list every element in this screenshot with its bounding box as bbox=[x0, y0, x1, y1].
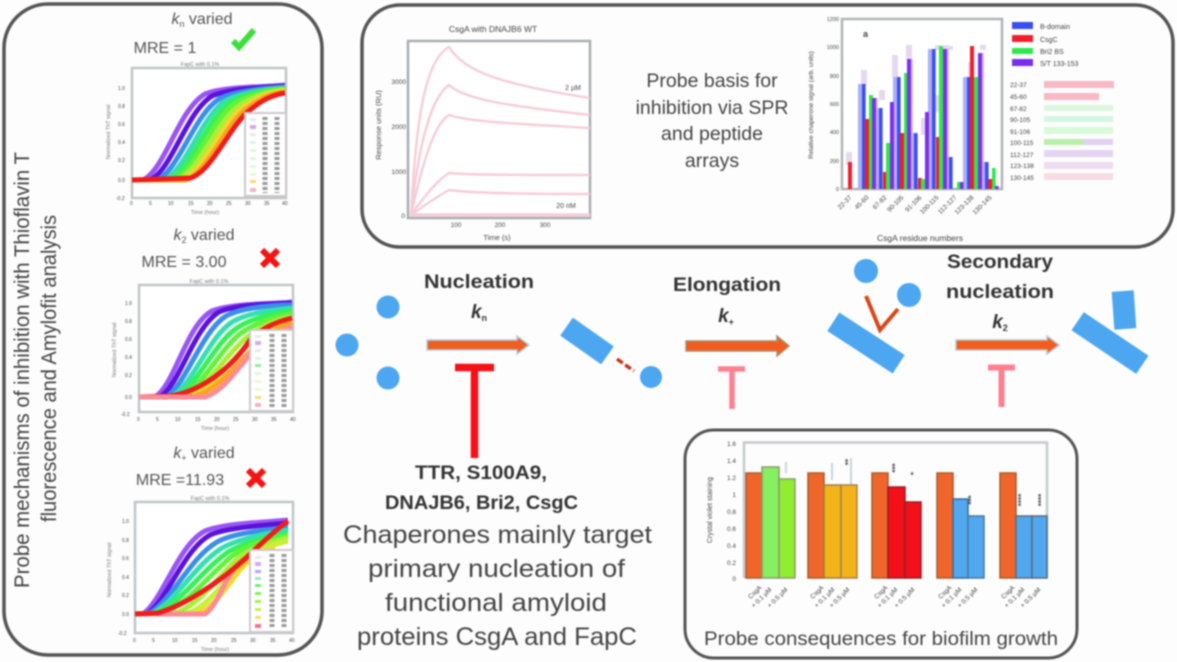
chart: SPR sensorgram: 1000 bbox=[392, 169, 406, 176]
chart: fit 2 curves: 0 bbox=[137, 417, 140, 423]
chart: fit 3 curves: 0.8 bbox=[122, 538, 129, 544]
chart: peptide array bars: 100-115 bbox=[919, 194, 941, 216]
chart: SPR sensorgram: 20 nM bbox=[556, 203, 576, 210]
chart: fit 3 curves: 20 bbox=[211, 638, 217, 644]
chart: fit 1 curves: 5 bbox=[149, 201, 152, 207]
chart: fit 3 curves: 30 bbox=[250, 638, 256, 644]
label: nucleation: n bbox=[482, 313, 487, 323]
chart: fit 3 curves: Normalized ThT signal bbox=[107, 543, 113, 597]
label: secondary nucleation: nucleation bbox=[946, 282, 1054, 303]
chart: fit 1 curves: 0.2 bbox=[118, 158, 125, 164]
label: nucleation bbox=[424, 272, 534, 323]
panel description: inhibition via SPR bbox=[636, 97, 788, 119]
fit 1 heading: k bbox=[171, 11, 180, 28]
chart: fit 1 curves: Normalized ThT signal bbox=[106, 105, 112, 159]
chart: fit 1 curves: -0.2 bbox=[116, 196, 125, 202]
label: elongation: + bbox=[729, 317, 734, 327]
panel description: arrays bbox=[685, 150, 739, 172]
chart: crystal violet bars: + 0.1 µM bbox=[813, 586, 836, 610]
icon: red cross bbox=[262, 250, 278, 266]
chart: fit 1 curves: 40 bbox=[282, 201, 288, 207]
chart: crystal violet bars: 0.8 bbox=[727, 509, 736, 516]
chart: fit 3 curves: 15 bbox=[192, 638, 198, 644]
chart: peptide array bars bbox=[808, 17, 1002, 243]
peptide sequence list: 112-127 bbox=[1010, 152, 1034, 159]
chart: fit 2 curves: 30 bbox=[252, 417, 258, 423]
chart: fit 2 curves: FapC with 0.1% bbox=[190, 279, 229, 285]
chart: fit 3 curves: 1.0 bbox=[122, 519, 129, 525]
chart: crystal violet bars: **** bbox=[1017, 493, 1026, 506]
panel: biofilm growth bbox=[685, 430, 1077, 658]
chart: fit 3 curves: 0.2 bbox=[122, 593, 129, 599]
chart: crystal violet bars: + 0.1 µM bbox=[876, 586, 899, 610]
chart: peptide array bars: 90-105 bbox=[886, 194, 906, 214]
chart: crystal violet bars: + 0.1 µM bbox=[750, 586, 773, 610]
chart: crystal violet bars: + 0.5 µM bbox=[956, 586, 979, 610]
panel: SPR and peptide arrays bbox=[362, 5, 1173, 247]
chart: fit 3 curves: 0.6 bbox=[122, 556, 129, 562]
label: elongation: k bbox=[718, 306, 730, 327]
chart: peptide array bars: 1200 bbox=[827, 17, 839, 23]
label: secondary nucleation bbox=[946, 252, 1054, 333]
chart: crystal violet bars: 1.6 bbox=[727, 441, 736, 448]
inhibition bar: nucleation bbox=[455, 368, 494, 458]
rotated panel heading bbox=[11, 152, 61, 588]
chart: crystal violet bars: * bbox=[910, 471, 914, 480]
chart: fit 3 curves: 0.4 bbox=[122, 575, 129, 581]
rotated panel heading: Probe mechanisms of inhibition with Thioflavin T bbox=[11, 152, 34, 588]
chart: SPR sensorgram: 0 bbox=[401, 213, 405, 220]
chart: SPR sensorgram: 300 bbox=[540, 222, 551, 229]
peptide sequence list: 100-115 bbox=[1010, 140, 1034, 147]
chart: crystal violet bars: 0.6 bbox=[727, 526, 736, 533]
arrow: nucleation bbox=[427, 336, 529, 354]
chart: crystal violet bars: 0 bbox=[732, 576, 736, 583]
fit 3 heading bbox=[136, 445, 235, 489]
conclusion text: functional amyloid bbox=[385, 589, 607, 617]
small elongation mark bbox=[617, 359, 634, 371]
chart: fit 3 curves: 35 bbox=[270, 638, 276, 644]
chart: fit 1 curves: 1.0 bbox=[118, 86, 125, 92]
chart: crystal violet bars: 0.2 bbox=[727, 560, 736, 567]
chart: peptide array bars: 200 bbox=[830, 159, 839, 165]
label: secondary nucleation: Secondary bbox=[947, 252, 1053, 273]
chart: fit 1 curves: 0.8 bbox=[118, 104, 125, 110]
label: elongation bbox=[673, 275, 781, 327]
chart: crystal violet bars bbox=[707, 441, 1047, 610]
label: secondary nucleation: 2 bbox=[1003, 323, 1008, 333]
chart: fit 3 curves: 0 bbox=[133, 638, 136, 644]
arrow: secondary nucleation bbox=[956, 336, 1059, 354]
label: nucleation: Nucleation bbox=[424, 272, 534, 293]
fibril nucleus bbox=[560, 318, 614, 364]
chart: peptide array bars: 600 bbox=[830, 102, 839, 108]
peptide sequence list: 67-82 bbox=[1010, 106, 1027, 113]
chart: fit 2 curves: 25 bbox=[233, 417, 239, 423]
chart: peptide array bars: 400 bbox=[830, 130, 839, 136]
chart: peptide array bars: 45-60 bbox=[854, 194, 871, 211]
chart: SPR sensorgram: 2000 bbox=[392, 124, 406, 131]
chart: peptide array bars: CsgA residue numbers bbox=[877, 233, 963, 243]
chart: fit 2 curves: 40 bbox=[290, 417, 296, 423]
chart: fit 2 curves: 0.8 bbox=[125, 319, 132, 325]
conclusion text bbox=[343, 521, 652, 651]
fit 1 heading: MRE = 1 bbox=[134, 40, 196, 57]
fit 1 heading: n bbox=[179, 19, 184, 29]
chart: crystal violet bars: ** bbox=[844, 458, 853, 465]
fit 3 heading: varied bbox=[187, 445, 235, 462]
chart: crystal violet bars: *** bbox=[891, 462, 900, 473]
chart: crystal violet bars: + 0.1 µM bbox=[1003, 586, 1026, 610]
chart: fit 2 curves: 0.6 bbox=[125, 337, 132, 343]
pathway: monomers bbox=[336, 296, 400, 390]
chart: fit 2 curves: Time (hour) bbox=[201, 426, 229, 432]
chart: peptide array bars: 123-138 bbox=[954, 194, 976, 216]
panel description: Probe basis for bbox=[646, 70, 778, 92]
chart: fit 1 curves: 0.0 bbox=[118, 178, 125, 184]
chart: crystal violet bars: CsgA bbox=[873, 584, 890, 601]
chart: peptide array bars: 67-82 bbox=[872, 194, 889, 211]
panel caption: Probe consequences for biofilm growth bbox=[704, 629, 1058, 650]
chart: crystal violet bars: CsgA bbox=[809, 584, 826, 601]
inhibition bar: secondary nucleation bbox=[988, 368, 1015, 407]
chart: fit 1 curves: 25 bbox=[226, 201, 232, 207]
chart: SPR sensorgram: 3000 bbox=[392, 79, 406, 86]
chart: fit 2 curves: 0.2 bbox=[125, 373, 132, 379]
chart: fit 1 curves bbox=[106, 62, 288, 216]
fit 1 heading: varied bbox=[184, 11, 233, 28]
chart: fit 3 curves: Time (hour) bbox=[201, 647, 229, 653]
fit 2 heading bbox=[142, 227, 235, 271]
panel: inhibition mechanism fits bbox=[4, 4, 322, 655]
monomer bbox=[640, 366, 662, 388]
secondary nucleation monomers and fibril bbox=[827, 259, 921, 373]
rotated panel heading: fluorescence and Amylofit analysis bbox=[38, 215, 61, 522]
arrow: elongation bbox=[686, 336, 789, 356]
chart: peptide array bars: 0 bbox=[836, 187, 839, 193]
icon: red cross bbox=[248, 470, 264, 486]
chart: fit 2 curves: 1.0 bbox=[125, 301, 132, 307]
fit 3 heading: + bbox=[181, 453, 187, 463]
peptide sequence list: 45-60 bbox=[1010, 94, 1027, 101]
chart: fit 2 curves: 0.0 bbox=[125, 395, 132, 401]
chart: fit 2 curves: 15 bbox=[195, 417, 201, 423]
chart: peptide array bars: 112-127 bbox=[937, 194, 959, 216]
chart: SPR sensorgram: Response units (RU) bbox=[374, 90, 383, 160]
chart: crystal violet bars: 1.4 bbox=[727, 458, 736, 465]
chart: SPR sensorgram: 100 bbox=[451, 222, 462, 229]
peptide sequence list: 91-106 bbox=[1010, 129, 1031, 136]
chart: fit 2 curves: 0.4 bbox=[125, 355, 132, 361]
chart: fit 1 curves: 30 bbox=[245, 201, 251, 207]
chart: peptide array bars: 800 bbox=[830, 74, 839, 80]
legend: chaperones: S/T 133-153 bbox=[1040, 61, 1079, 68]
chart: crystal violet bars: CsgA bbox=[1000, 584, 1017, 601]
conclusion text: proteins CsgA and FapC bbox=[357, 623, 637, 651]
chart: crystal violet bars: + 0.1 µM bbox=[940, 586, 963, 610]
chart: fit 1 curves: FapC with 0.1% bbox=[181, 62, 220, 68]
conclusion text: primary nucleation of bbox=[368, 555, 625, 583]
chart: crystal violet bars: + 0.5 µM bbox=[893, 586, 916, 610]
label: elongation: Elongation bbox=[673, 275, 781, 296]
chart: SPR sensorgram bbox=[374, 24, 590, 242]
fit 3 heading: MRE =11.93 bbox=[136, 472, 224, 489]
chart: fit 3 curves bbox=[107, 496, 295, 653]
chart: fit 2 curves: 35 bbox=[271, 417, 277, 423]
chart: fit 2 curves: 20 bbox=[214, 417, 220, 423]
chart: crystal violet bars: **** bbox=[1037, 493, 1046, 506]
chart: fit 2 curves: -0.2 bbox=[121, 412, 130, 418]
chart: peptide array bars: 22-37 bbox=[837, 194, 854, 211]
chart: crystal violet bars: + 0.5 µM bbox=[828, 586, 851, 610]
chart: fit 3 curves: 5 bbox=[152, 638, 155, 644]
panel description bbox=[636, 70, 788, 172]
chart: crystal violet bars: 1 bbox=[732, 492, 736, 499]
chart: fit 3 curves: 10 bbox=[172, 638, 178, 644]
fit 3 heading: k bbox=[173, 445, 182, 462]
label: nucleation: k bbox=[471, 302, 483, 323]
peptide sequence list: 123-138 bbox=[1010, 163, 1034, 170]
legend: chaperones: B-domain bbox=[1040, 24, 1070, 31]
conclusion text: Chaperones mainly target bbox=[343, 521, 652, 549]
chaperone names bbox=[385, 463, 578, 514]
chart: crystal violet bars: + 0.5 µM bbox=[766, 586, 789, 610]
chart: fit 1 curves: 10 bbox=[168, 201, 174, 207]
fit 2 heading: varied bbox=[186, 227, 235, 244]
label: secondary nucleation: k bbox=[992, 312, 1004, 333]
chart: fit 3 curves: 40 bbox=[289, 638, 295, 644]
chart: fit 2 curves: 5 bbox=[156, 417, 159, 423]
fibril with secondary nucleus bbox=[1072, 290, 1148, 374]
chart: fit 3 curves: 25 bbox=[231, 638, 237, 644]
fit 1 heading bbox=[134, 11, 233, 57]
chart: fit 2 curves: Normalized ThT signal bbox=[112, 323, 118, 377]
chart: fit 1 curves: 35 bbox=[264, 201, 270, 207]
chart: peptide array bars: 91-106 bbox=[904, 194, 924, 214]
chart: peptide array bars: 130-145 bbox=[972, 194, 994, 216]
chart: peptide array bars: Relative chaperone signal (arb. units) bbox=[808, 51, 815, 159]
peptide sequence list bbox=[1010, 81, 1114, 182]
chart: crystal violet bars: CsgA bbox=[747, 584, 764, 601]
icon: green check mark bbox=[233, 30, 254, 47]
chart: fit 2 curves bbox=[112, 279, 296, 432]
chart: crystal violet bars: CsgA bbox=[937, 584, 954, 601]
chart: fit 2 curves: 10 bbox=[175, 417, 181, 423]
chart: fit 1 curves: Time (hour) bbox=[191, 210, 219, 216]
legend: chaperones: Bri2 BS bbox=[1040, 49, 1064, 56]
peptide sequence list: 90-105 bbox=[1010, 117, 1031, 124]
chart: peptide array bars: a bbox=[863, 29, 869, 39]
chart: fit 3 curves: -0.2 bbox=[118, 631, 127, 637]
peptide sequence list: 22-37 bbox=[1010, 82, 1027, 89]
chart: SPR sensorgram: 2 µM bbox=[565, 85, 581, 92]
inhibition bar: elongation bbox=[718, 369, 745, 409]
chaperone names: DNAJB6, Bri2, CsgC bbox=[385, 493, 578, 514]
chart: fit 1 curves: 0 bbox=[130, 201, 133, 207]
legend: chaperones: CsgC bbox=[1040, 37, 1058, 44]
chart: fit 1 curves: 15 bbox=[188, 201, 194, 207]
chart: crystal violet bars: Crystal violet staining bbox=[707, 477, 714, 543]
fit 2 heading: 2 bbox=[181, 235, 186, 245]
chart: fit 1 curves: 20 bbox=[207, 201, 213, 207]
panel description: and peptide bbox=[661, 123, 763, 145]
chart: SPR sensorgram: CsgA with DNAJB6 WT bbox=[449, 24, 537, 34]
legend: chaperones bbox=[1012, 22, 1079, 68]
fit 2 heading: MRE = 3.00 bbox=[142, 254, 227, 271]
chart: fit 1 curves: 0.4 bbox=[118, 140, 125, 146]
chart: crystal violet bars: 0.4 bbox=[727, 543, 736, 550]
peptide sequence list: 130-145 bbox=[1010, 175, 1034, 182]
chart: crystal violet bars: + 0.5 µM bbox=[1019, 586, 1042, 610]
fit 2 heading: k bbox=[173, 227, 182, 244]
chart: fit 3 curves: 0.0 bbox=[122, 612, 129, 618]
chart: fit 1 curves: 0.6 bbox=[118, 122, 125, 128]
chart: crystal violet bars: 1.2 bbox=[727, 475, 736, 482]
chart: crystal violet bars: *** bbox=[967, 494, 976, 505]
chart: peptide array bars: 1000 bbox=[827, 45, 839, 51]
chaperone names: TTR, S100A9, bbox=[415, 463, 547, 484]
chart: fit 3 curves: FapC with 0.1% bbox=[191, 496, 230, 502]
chart: SPR sensorgram: 200 bbox=[495, 222, 506, 229]
chart: SPR sensorgram: Time (s) bbox=[483, 233, 511, 242]
